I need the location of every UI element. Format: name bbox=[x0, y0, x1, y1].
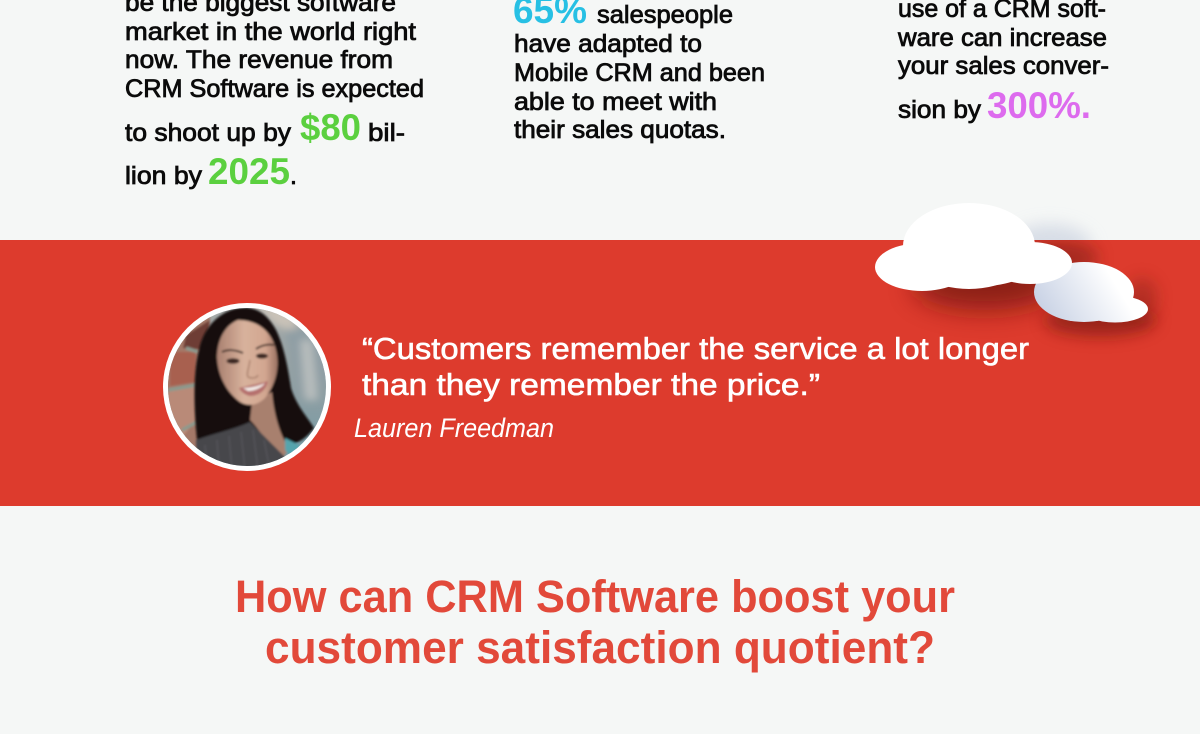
face bbox=[217, 320, 278, 405]
mouth bbox=[239, 381, 268, 396]
text block: mobile CRM salespeople: salespeople bbox=[597, 1, 733, 29]
quote: “Customers remember the service a lot longer bbox=[362, 331, 1029, 366]
text block: CRM market revenue: CRM Software is expected bbox=[125, 75, 424, 103]
quote: than they remember the price.” bbox=[362, 367, 820, 402]
text block: CRM market revenue: to shoot up by bbox=[125, 119, 292, 147]
text block: sales conversion bbox=[897, 0, 1109, 126]
text block: CRM market revenue bbox=[125, 0, 424, 192]
text block: sales conversion: your sales conver- bbox=[898, 52, 1109, 80]
quote bbox=[362, 331, 1029, 402]
sweater bbox=[194, 421, 285, 466]
icon: large front cloud bbox=[875, 203, 1072, 291]
portrait: Lauren Freedman bbox=[160, 300, 335, 475]
icon: small rear cloud bbox=[1034, 262, 1148, 322]
brows and eyes bbox=[222, 345, 274, 353]
text block: CRM market revenue: now. The revenue from bbox=[125, 46, 393, 74]
icon: cloud shadows bbox=[913, 224, 1157, 336]
text block: mobile CRM salespeople: have adapted to bbox=[514, 30, 702, 58]
text block: CRM market revenue: $80 bbox=[300, 107, 361, 148]
text block: CRM market revenue: lion by bbox=[125, 162, 203, 190]
text block: CRM market revenue: . bbox=[290, 162, 297, 190]
heading: customer satisfaction: customer satisfaction quotient? bbox=[265, 622, 935, 673]
heading: customer satisfaction: How can CRM Software boost your bbox=[235, 571, 955, 622]
text block: sales conversion: sion by bbox=[898, 96, 982, 124]
text block: CRM market revenue: bil- bbox=[368, 119, 405, 147]
photo background: brick wall bbox=[168, 316, 212, 457]
text block: mobile CRM salespeople: able to meet with bbox=[514, 88, 717, 116]
text block: CRM market revenue: 2025 bbox=[208, 151, 290, 192]
hair bbox=[195, 308, 314, 445]
text block: sales conversion: 300%. bbox=[987, 85, 1091, 126]
panel: red quote band bbox=[0, 203, 1200, 506]
neck bbox=[250, 392, 289, 458]
teal top bbox=[285, 438, 301, 456]
text block: mobile CRM salespeople: Mobile CRM and been bbox=[514, 59, 765, 87]
text block: mobile CRM salespeople: their sales quotas. bbox=[514, 116, 726, 144]
text block: sales conversion: ware can increase bbox=[897, 24, 1107, 52]
heading: customer satisfaction bbox=[235, 571, 955, 673]
quote attribution: Lauren Freedman bbox=[354, 413, 554, 443]
text block: CRM market revenue: market in the world right bbox=[125, 18, 416, 46]
text block: mobile CRM salespeople bbox=[513, 0, 765, 144]
